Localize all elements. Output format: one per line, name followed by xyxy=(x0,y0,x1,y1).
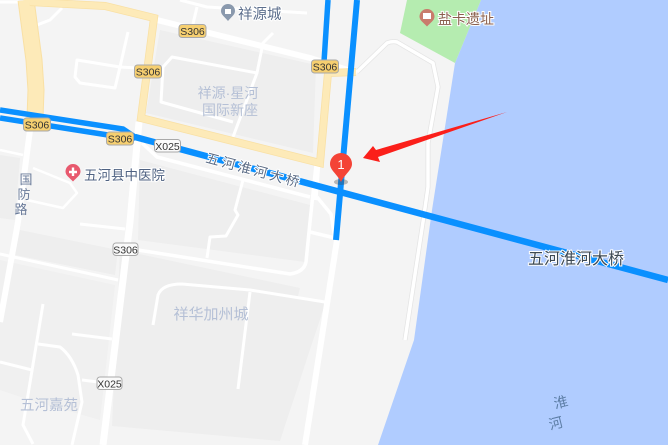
shield: S306 middle: S306 xyxy=(136,66,160,78)
shield: X025 lower: X025 xyxy=(97,378,122,390)
shield: S306 left: S306 xyxy=(25,120,49,132)
marker pin 1: 1 xyxy=(337,157,345,172)
blue highlighted roads xyxy=(0,0,668,280)
POI: Traditional Chinese medicine hospital: 五河县中医院 xyxy=(84,168,165,183)
label: Xianghua Jiazhou City: 祥华加州城 xyxy=(173,306,249,323)
POI: Traditional Chinese medicine hospital xyxy=(66,164,165,183)
river xyxy=(378,0,668,445)
label: Xiangyuan Xinghe xyxy=(198,85,258,118)
building blocks xyxy=(0,30,325,441)
marker pin 1 xyxy=(330,153,352,185)
label: Xiangyuan Xinghe: 祥源·星河 xyxy=(198,85,258,101)
label: Guofang Road: 路 xyxy=(14,202,28,217)
minor roads xyxy=(0,0,438,445)
POI: Yanka ruins xyxy=(420,9,494,27)
shield: S306 right: S306 xyxy=(313,62,337,74)
park area xyxy=(400,0,481,63)
label: Huai River: 淮 xyxy=(552,393,570,412)
shield: S306 bridge: S306 xyxy=(108,134,132,146)
yellow provincial road S306 xyxy=(26,0,356,163)
shield: S306 top: S306 xyxy=(180,26,205,38)
POI: Xiangyuan City xyxy=(221,4,282,23)
label: Xiangyuan Xinghe: 国际新座 xyxy=(202,102,258,118)
POI: Yanka ruins: 盐卡遗址 xyxy=(438,11,494,27)
label: Huai River: 河 xyxy=(547,414,565,433)
shield: X025 upper: X025 xyxy=(155,141,180,153)
shield: S306 lower: S306 xyxy=(113,244,138,256)
label: Guofang Road: 国 xyxy=(19,172,33,187)
main white roads xyxy=(0,20,357,445)
POI: Xiangyuan City: 祥源城 xyxy=(238,6,282,23)
label: bridge name along road: 五河淮河大桥 xyxy=(204,150,304,191)
road labels xyxy=(24,24,338,390)
arrow: red pointer xyxy=(363,112,507,162)
label: Wuhe Jiayuan: 五河嘉苑 xyxy=(20,397,78,414)
label: Guofang Road xyxy=(14,172,33,217)
label: Guofang Road: 防 xyxy=(17,187,31,202)
label: bridge name: 五河淮河大桥 xyxy=(528,250,624,268)
label: Huai River xyxy=(547,393,570,433)
